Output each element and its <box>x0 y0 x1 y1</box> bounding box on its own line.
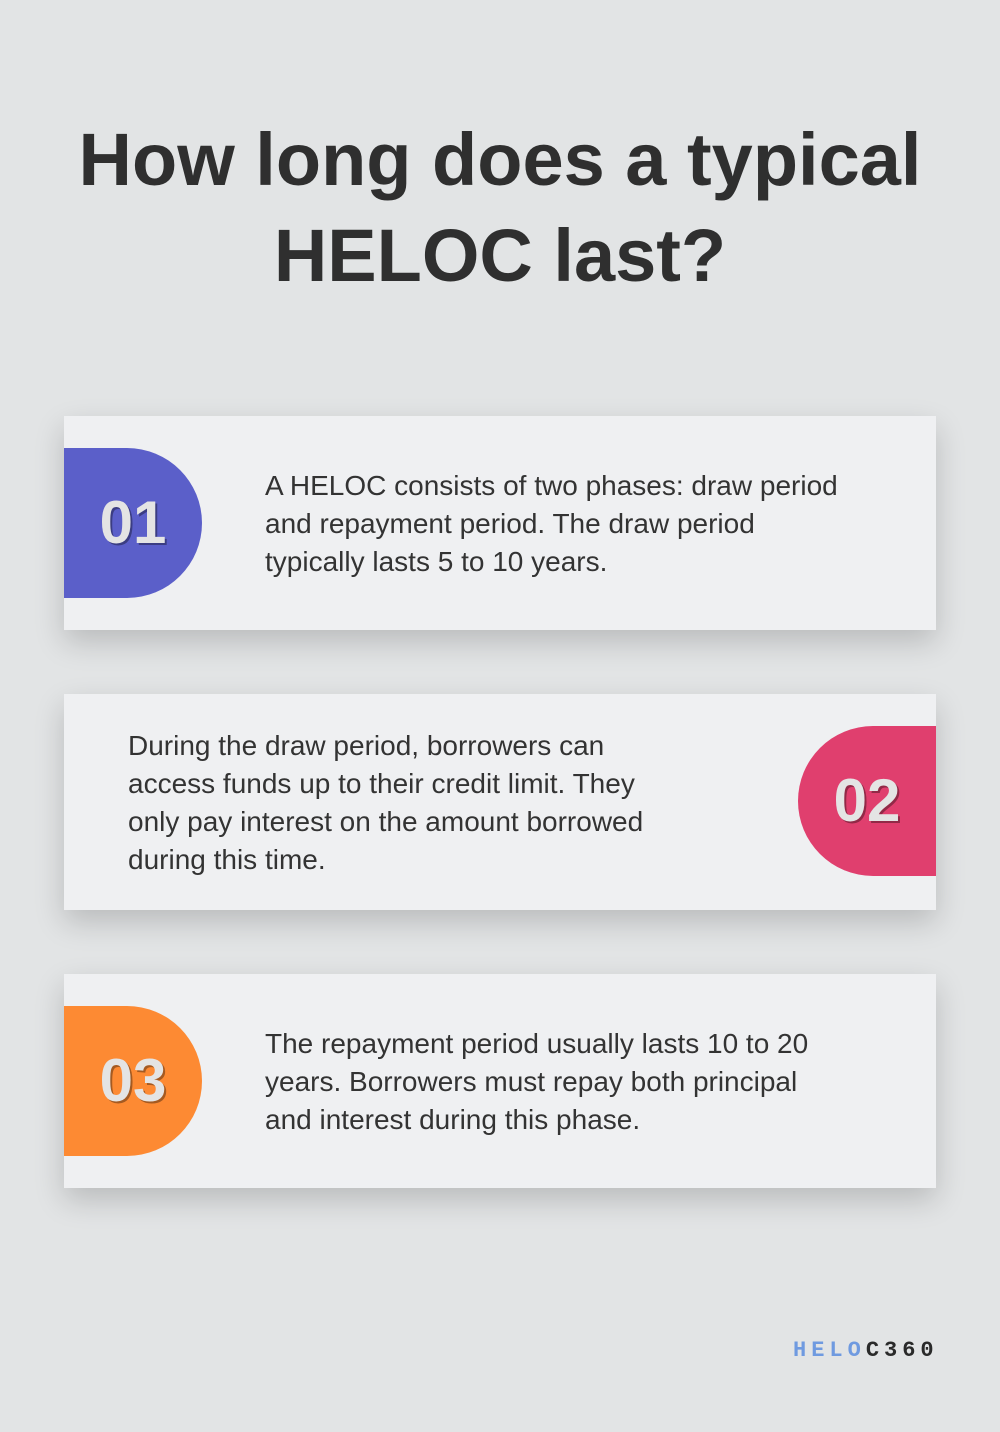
text 01: A HELOC consists of two phases: draw period and repayment period. The draw period typically lasts 5 to 10 years. <box>265 470 838 577</box>
badge 03 <box>64 1006 202 1156</box>
badge 02: 02 <box>834 767 900 834</box>
title <box>79 118 921 297</box>
badge 02 <box>798 726 936 876</box>
text 02: During the draw period, borrowers can access funds up to their credit limit. They only pay interest on the amount borrowed during this time. <box>128 730 643 875</box>
panel: step 02 <box>64 694 936 910</box>
text 03: The repayment period usually lasts 10 to 20 years. Borrowers must repay both principal and interest during this phase. <box>265 1028 808 1135</box>
badge 03: 03 <box>100 1047 166 1114</box>
badge 01 <box>64 448 202 598</box>
title: How long does a typical <box>79 118 921 201</box>
panel: step 03 <box>64 974 936 1188</box>
logo: HELOC360 <box>793 1338 939 1363</box>
title: HELOC last? <box>274 214 726 297</box>
panel: step 01 <box>64 416 936 630</box>
badge 01: 01 <box>100 489 166 556</box>
